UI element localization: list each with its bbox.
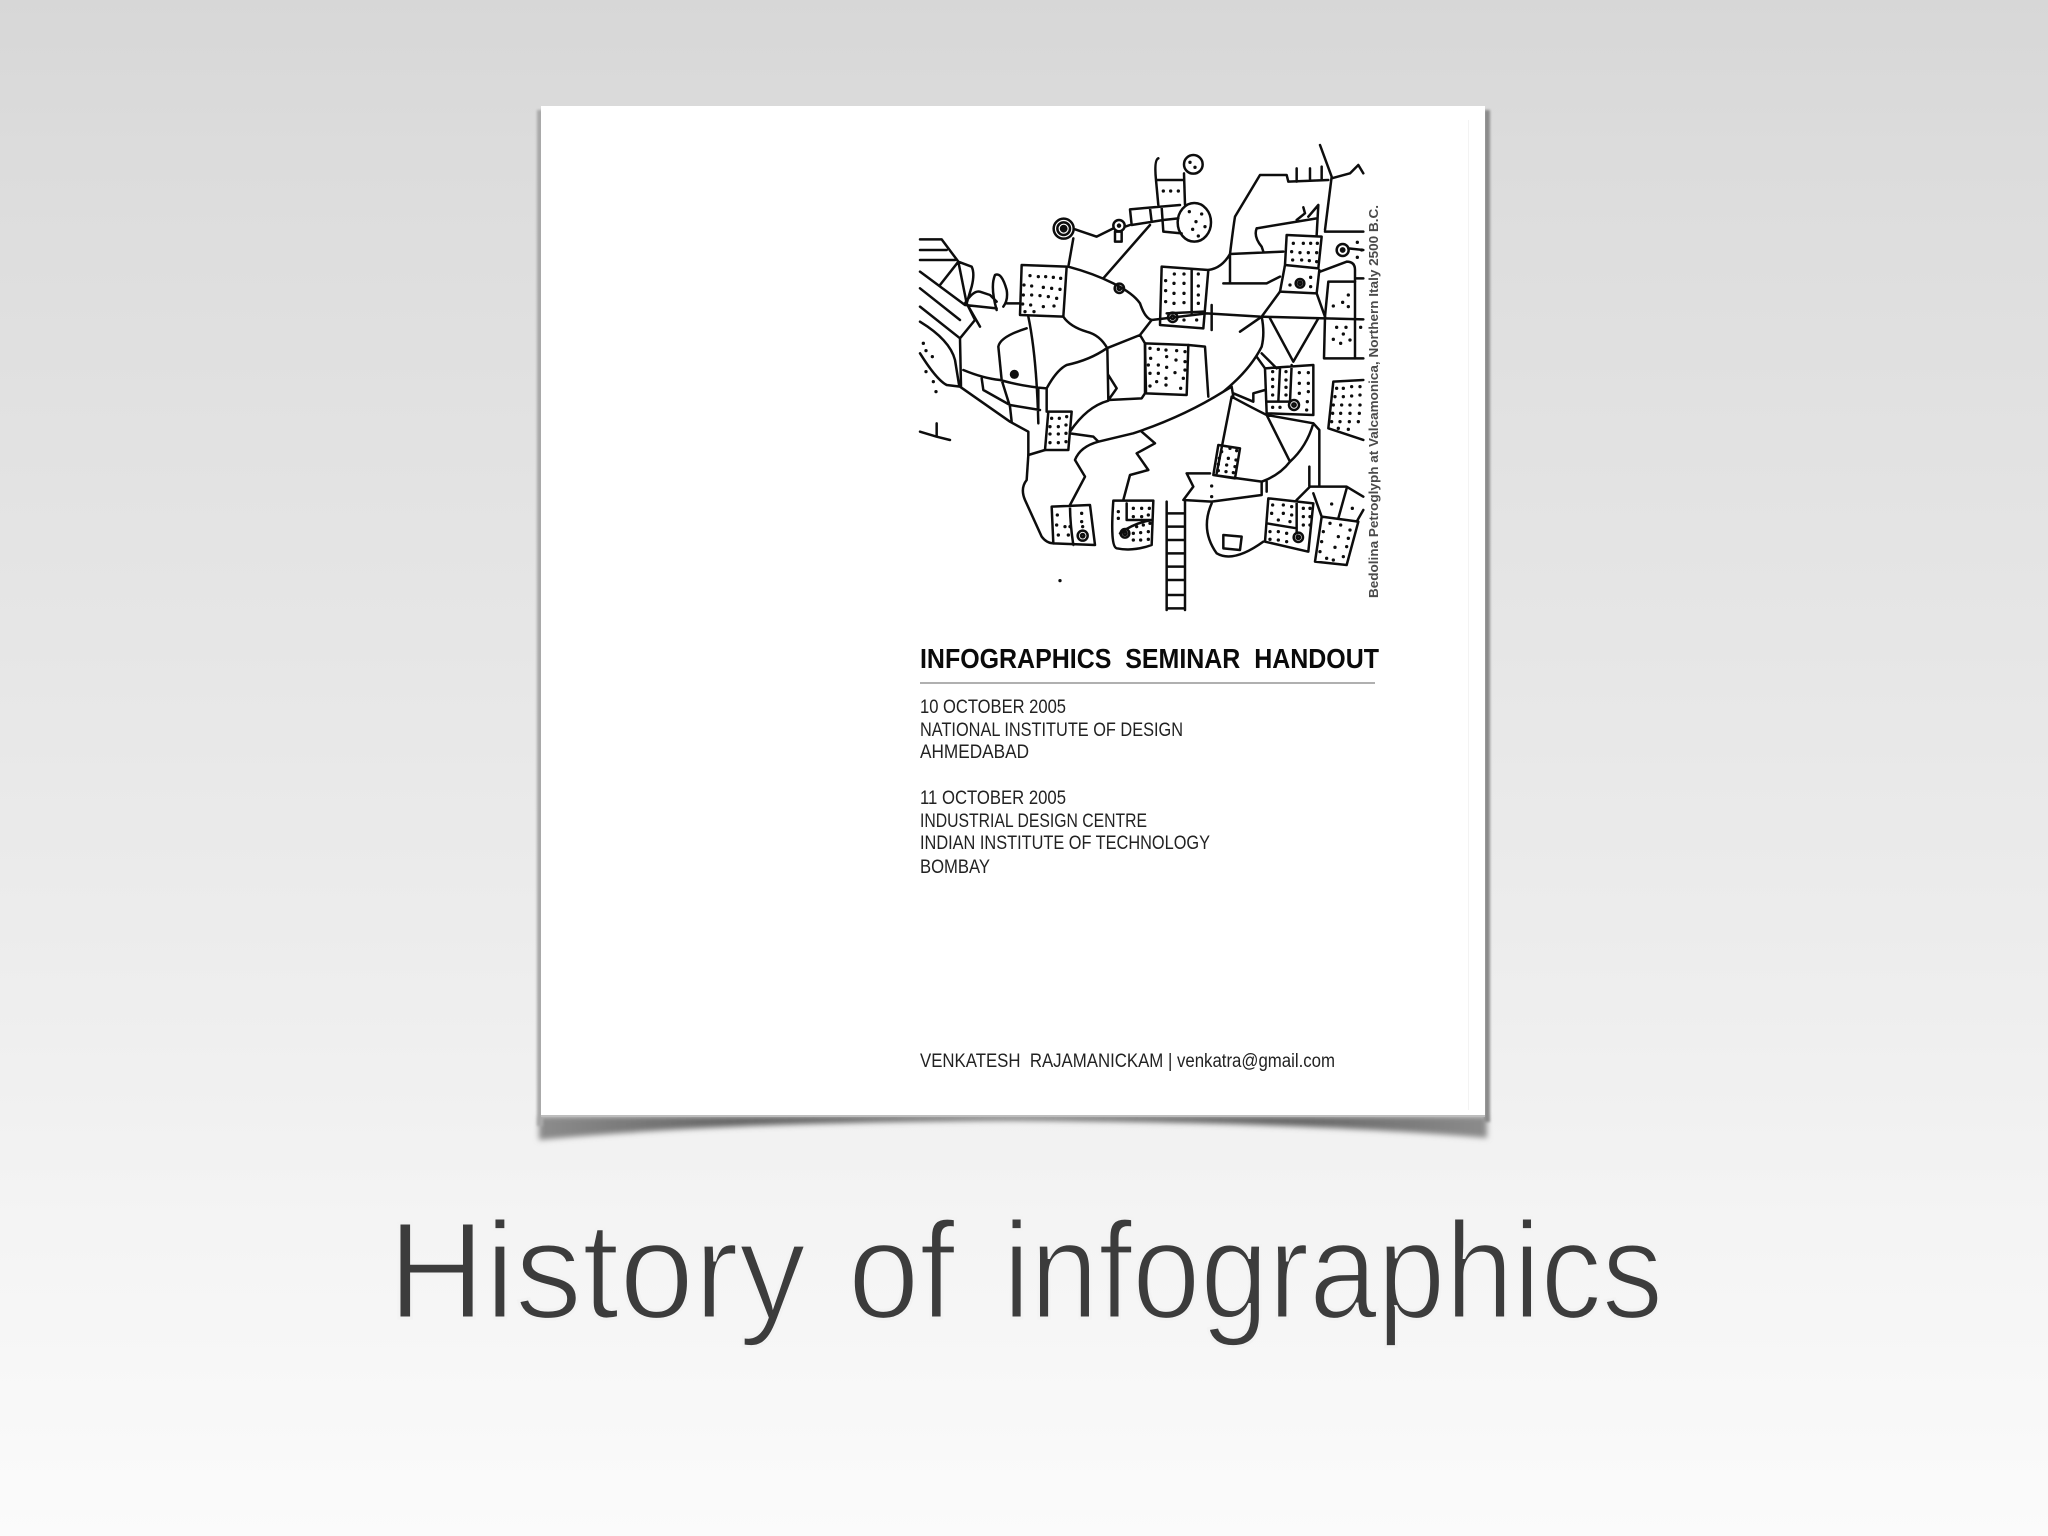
text block: Bombay session: 11 OCTOBER 2005 [920, 788, 1066, 809]
text block: Ahmedabad session: NATIONAL INSTITUTE OF DESIGN [920, 720, 1183, 741]
title: of [848, 1194, 956, 1348]
text block: Bombay session [920, 788, 1210, 878]
sheet right edge shadow [1484, 110, 1490, 1122]
map dots [923, 162, 1362, 581]
text block: Bombay session: BOMBAY [920, 857, 990, 878]
sheet curved bottom shadow [539, 1116, 1487, 1140]
text block: Ahmedabad session: AHMEDABAD [920, 742, 1029, 763]
map settlement circles [1011, 155, 1349, 542]
panel: handout sheet with shadow [537, 106, 1490, 1140]
rotated caption: petroglyph source: Bedolina Petroglyph at Valcamonica, Northern Italy 2500 B.C. [1367, 205, 1381, 598]
handout heading: INFOGRAPHICS SEMINAR HANDOUT [920, 643, 1379, 674]
map ladder [1167, 502, 1185, 610]
title: infographics [1003, 1194, 1663, 1348]
sheet left edge shadow [537, 110, 543, 1126]
text block: Ahmedabad session [920, 697, 1183, 763]
map routes and fields [920, 239, 1363, 543]
author credit: VENKATESH RAJAMANICKAM | venkatra@gmail.com [920, 1051, 1335, 1072]
white sheet [541, 106, 1485, 1117]
map roads [1028, 145, 1363, 556]
text block: Ahmedabad session: 10 OCTOBER 2005 [920, 697, 1066, 718]
text block: Bombay session: INDUSTRIAL DESIGN CENTRE [920, 811, 1147, 832]
map fields [1020, 158, 1363, 565]
title: History [388, 1194, 806, 1348]
text block: Bombay session: INDIAN INSTITUTE OF TECHNOLOGY [920, 833, 1210, 854]
petroglyph map [920, 145, 1363, 610]
title [388, 1194, 1663, 1348]
